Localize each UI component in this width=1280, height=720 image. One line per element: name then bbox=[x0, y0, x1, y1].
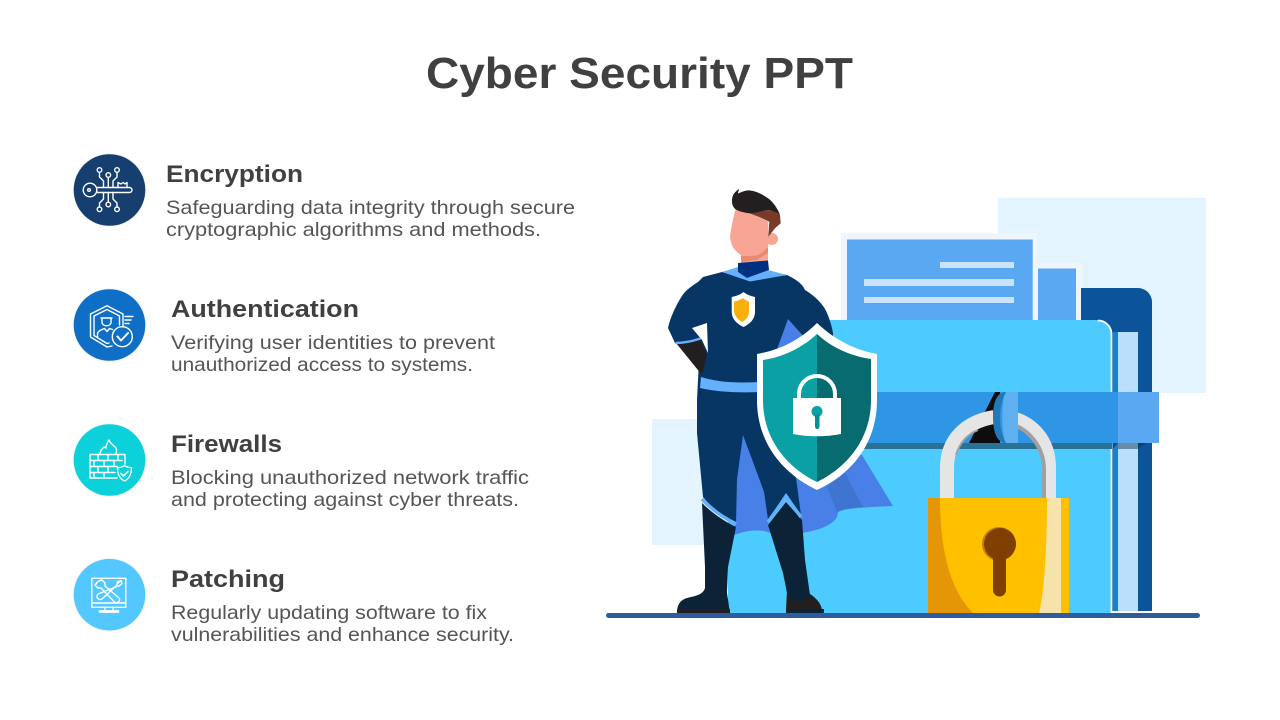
panel: authentication item bbox=[72, 288, 496, 376]
text: authentication description bbox=[171, 332, 496, 376]
heading: Patching: Patching bbox=[171, 566, 285, 593]
text: firewalls description: and protecting against cyber threats. bbox=[171, 489, 519, 511]
heading: Firewalls: Firewalls bbox=[171, 431, 282, 458]
icon: patching monitor tools bbox=[72, 558, 146, 632]
bracelet bbox=[676, 338, 700, 343]
head bbox=[730, 189, 781, 256]
keyhole bbox=[982, 527, 1016, 596]
background panel: lower left bbox=[652, 419, 712, 545]
shield bbox=[757, 323, 877, 490]
folder: front cover bbox=[728, 320, 1112, 613]
arm gap bbox=[692, 323, 708, 353]
legs and torso bbox=[668, 272, 833, 523]
belt bbox=[700, 377, 760, 392]
illustration: security guard with folder and padlock bbox=[606, 189, 1206, 618]
text: encryption description: cryptographic algorithms and methods. bbox=[166, 219, 541, 241]
text: authentication description: unauthorized access to systems. bbox=[171, 354, 473, 376]
folder: back cover bbox=[1081, 288, 1152, 611]
title: Cyber Security PPT bbox=[426, 49, 853, 98]
text: patching description bbox=[171, 602, 514, 646]
neck bbox=[741, 250, 768, 265]
panel: firewalls item bbox=[72, 423, 529, 511]
boot trim bbox=[702, 497, 801, 524]
icon: authentication shield user bbox=[72, 288, 146, 362]
panel: encryption item bbox=[72, 153, 575, 241]
heading: Encryption: Encryption bbox=[166, 161, 303, 188]
text: firewalls description: Blocking unauthorized network traffic bbox=[171, 467, 529, 489]
black hook bbox=[969, 392, 1000, 443]
lock body bbox=[928, 498, 1069, 613]
inner cape behind arm bbox=[776, 319, 805, 360]
background panel: upper right bbox=[998, 198, 1206, 393]
text: patching description: vulnerabilities and enhance security. bbox=[171, 624, 514, 646]
document: large sheet bbox=[841, 233, 1037, 324]
glove bbox=[676, 339, 707, 375]
icon: firewall brick wall bbox=[72, 423, 146, 497]
shield lock bbox=[793, 376, 841, 436]
strap shadow bbox=[728, 443, 1146, 449]
padlock bbox=[928, 392, 1069, 613]
ground line bbox=[606, 613, 1200, 618]
document: small sheet bbox=[1033, 263, 1082, 324]
panel: patching item bbox=[72, 558, 514, 646]
heading: Authentication: Authentication bbox=[171, 296, 359, 323]
ring bbox=[993, 392, 1018, 443]
text: encryption description bbox=[166, 197, 575, 241]
strap bbox=[728, 392, 1159, 443]
text: firewalls description bbox=[171, 467, 529, 511]
text: authentication description: Verifying user identities to prevent bbox=[171, 332, 496, 354]
text: encryption description: Safeguarding data integrity through secure bbox=[166, 197, 575, 219]
icon: encryption key circuit bbox=[72, 153, 146, 227]
cape bbox=[734, 435, 893, 535]
collar bbox=[722, 260, 787, 282]
chest badge bbox=[732, 292, 755, 327]
figure: hero bbox=[668, 189, 833, 613]
boots bbox=[677, 502, 824, 613]
shackle bbox=[947, 417, 1049, 498]
text: patching description: Regularly updating software to fix bbox=[171, 602, 487, 624]
